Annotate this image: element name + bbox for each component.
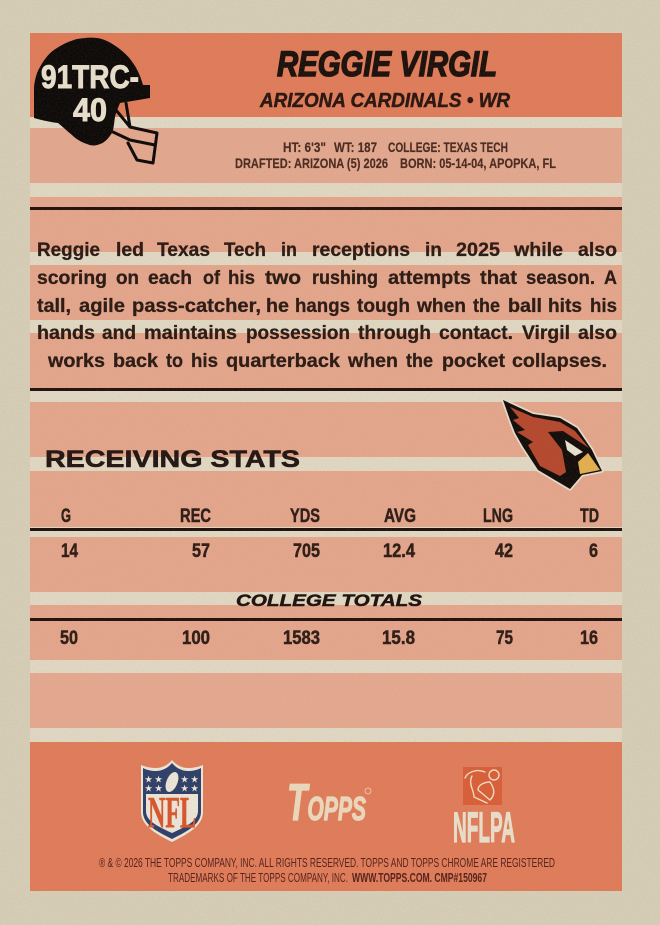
biography text: when <box>347 350 398 372</box>
biography text: receptions <box>312 239 410 261</box>
icon: NFLPA logo <box>453 767 515 852</box>
biography text: quarterback <box>226 350 340 372</box>
biography text: scoring <box>37 267 107 289</box>
stat table: 2025 season row: 14 <box>61 541 78 562</box>
copyright legal text: WWW.TOPPS.COM. CMP#150967 <box>352 871 487 885</box>
rule below biography <box>30 388 622 391</box>
icon: NFL shield: ★ <box>145 775 153 784</box>
stat table: college totals row: 75 <box>496 628 513 649</box>
biography text: his <box>228 267 255 289</box>
icon: NFL shield: ★ <box>191 784 199 793</box>
stat table: 2025 season row: 6 <box>589 541 598 562</box>
icon: NFL shield: ★ <box>181 784 189 793</box>
icon: helmet with card number <box>34 38 157 163</box>
text: NFLPA <box>453 804 515 852</box>
biography text: pass-catcher, <box>132 295 261 317</box>
biography text: also <box>578 322 617 344</box>
biography text: A <box>604 267 617 289</box>
copyright legal text: TRADEMARKS OF THE TOPPS COMPANY, INC. <box>168 871 348 885</box>
biography text: tough <box>357 295 410 317</box>
biography text: hands <box>37 322 95 344</box>
player name: REGGIE VIRGIL <box>277 45 497 84</box>
icon: NFL shield: ★ <box>155 775 163 784</box>
biography text: hangs <box>295 295 350 317</box>
section heading: receiving stats: RECEIVING STATS <box>45 446 300 473</box>
icon: NFL shield: ★ <box>145 784 153 793</box>
icon: Topps logo: TOPPS <box>287 774 366 832</box>
stat table: column headers: REC <box>180 506 211 527</box>
stat table: college totals row: 15.8 <box>382 628 415 649</box>
biography text: of <box>203 267 220 289</box>
stat table: column headers: LNG <box>483 506 513 527</box>
biography text: his <box>191 350 218 372</box>
biography text: works <box>47 350 105 372</box>
biography text: each <box>148 267 192 289</box>
striped panel backdrop <box>30 117 622 742</box>
biography text: Reggie <box>37 239 100 261</box>
biography text: Texas <box>157 239 210 261</box>
icon: NFL shield: NFL <box>148 788 196 837</box>
copyright legal text <box>99 856 555 885</box>
biography text: led <box>116 239 144 261</box>
stat table: 2025 season row: 12.4 <box>383 541 415 562</box>
biography text: the <box>473 295 500 317</box>
rule under stat headers <box>30 528 622 531</box>
biography text: also <box>578 239 617 261</box>
biography text: in <box>281 239 297 261</box>
biography text: and <box>102 322 136 344</box>
player vitals: WT: 187 <box>334 139 377 155</box>
player vitals: COLLEGE: TEXAS TECH <box>388 139 508 155</box>
biography text: he <box>266 295 289 317</box>
stat table: column headers <box>61 506 599 527</box>
icon: helmet with card number: 40 <box>73 92 107 128</box>
stat table: college totals row: 16 <box>580 628 598 649</box>
biography text: season. <box>526 267 595 289</box>
biography text: hits <box>548 295 582 317</box>
biography text: ball <box>508 295 542 317</box>
rule above biography <box>30 207 622 210</box>
icon: NFL shield: ★ <box>181 775 189 784</box>
team and position: ARIZONA CARDINALS • WR <box>259 90 511 112</box>
stat table: college totals row <box>60 628 598 649</box>
footer band <box>30 742 622 891</box>
stat table: column headers: G <box>61 506 71 527</box>
icon: NFL shield: ★ <box>155 784 163 793</box>
icon: NFL shield <box>141 760 203 842</box>
player vitals: HT: 6'3" <box>283 139 326 155</box>
biography text: maintains <box>144 322 237 344</box>
college totals heading: COLLEGE TOTALS <box>236 591 423 610</box>
stat table: 2025 season row: 42 <box>495 541 513 562</box>
biography text: rushing <box>312 267 378 289</box>
icon: NFL shield: ★ <box>191 775 199 784</box>
biography text: Virgil <box>522 322 570 344</box>
biography text: that <box>480 267 518 289</box>
biography text: when <box>416 295 466 317</box>
player vitals: BORN: 05-14-04, APOPKA, FL <box>400 155 556 171</box>
biography text: pocket <box>442 350 505 372</box>
biography text <box>37 239 617 372</box>
stat table: college totals row: 1583 <box>283 628 320 649</box>
biography text: collapses. <box>512 350 607 372</box>
icon: Arizona Cardinals logo <box>503 400 602 489</box>
biography text: in <box>425 239 442 261</box>
player vitals: DRAFTED: ARIZONA (5) 2026 <box>235 155 388 171</box>
stat table: column headers: TD <box>580 506 599 527</box>
stat table: column headers: YDS <box>290 506 320 527</box>
biography text: possession <box>246 322 350 344</box>
biography text: through <box>358 322 431 344</box>
biography text: attempts <box>388 267 471 289</box>
biography text: on <box>116 267 139 289</box>
biography text: two <box>265 267 301 289</box>
stat table: column headers: AVG <box>384 506 416 527</box>
biography text: back <box>113 350 158 372</box>
stat table: college totals row: 50 <box>60 628 78 649</box>
stat table: 2025 season row <box>61 541 598 562</box>
biography text: his <box>590 295 617 317</box>
biography text: to <box>166 350 183 372</box>
rule under college totals <box>30 618 622 621</box>
biography text: tall, <box>37 295 71 317</box>
biography text: while <box>513 239 563 261</box>
stat table: 2025 season row: 57 <box>192 541 210 562</box>
biography text: 2025 <box>456 239 500 261</box>
stat table: 2025 season row: 705 <box>293 541 320 562</box>
biography text: Tech <box>224 239 266 261</box>
biography text: the <box>406 350 433 372</box>
header band <box>30 33 622 117</box>
stat table: college totals row: 100 <box>182 628 210 649</box>
biography text: contact. <box>439 322 513 344</box>
icon: helmet with card number: 91TRC- <box>41 59 139 95</box>
player vitals <box>235 139 556 171</box>
biography text: agile <box>79 295 125 317</box>
